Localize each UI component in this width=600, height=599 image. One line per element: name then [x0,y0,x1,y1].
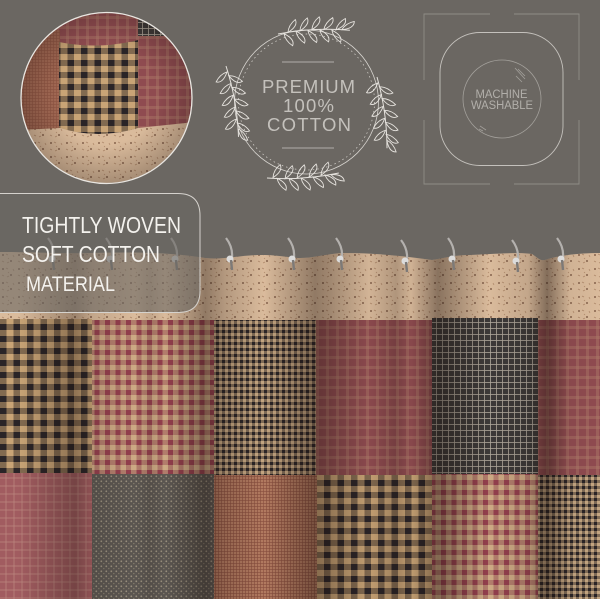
magnified fabric circle [20,12,195,190]
washable text: MACHINE [476,89,528,101]
badge: machine washable [424,14,579,184]
photo: patchwork shower curtain [0,252,600,599]
patch row 2 [0,473,600,599]
patch row 1 [0,318,600,475]
callout text: SOFT COTTON [22,241,160,267]
badge text: COTTON [267,114,351,135]
wreath ring [234,30,378,174]
corner brackets [424,14,579,184]
badge text: 100% [283,95,334,116]
callout text: TIGHTLY WOVEN [22,212,181,238]
callout text: MATERIAL [26,273,115,296]
curtain top ruffle band [0,252,600,322]
washer door circle [463,60,541,138]
washable text: WASHABLE [471,100,533,112]
callout text [22,212,181,296]
callout: tightly woven soft cotton material [0,194,200,312]
rounded washer outline [440,32,563,166]
badge: premium 100% cotton wreath [214,15,403,193]
wreath leaf branches [214,15,403,193]
badge text [262,62,355,148]
washable text [471,89,533,112]
curtain hooks [48,238,564,272]
fold shading [0,252,600,599]
badge text: PREMIUM [262,76,355,97]
